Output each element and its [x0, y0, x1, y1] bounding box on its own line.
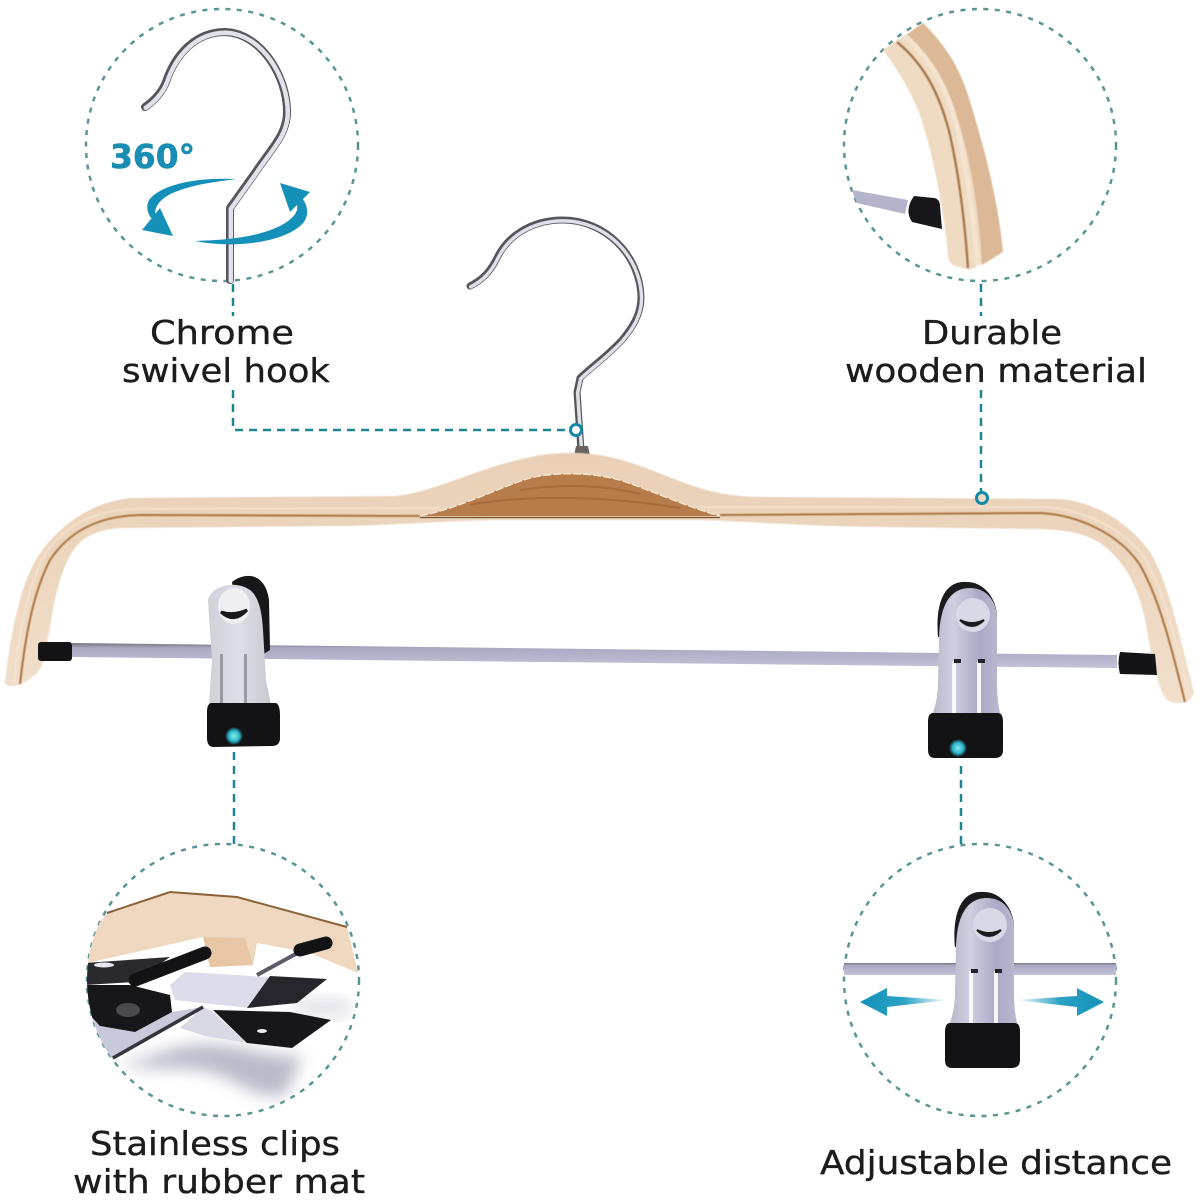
clip photo	[85, 892, 358, 1096]
marker: right clip	[949, 739, 967, 757]
panel: adjustable distance	[844, 844, 1116, 1116]
left clip	[207, 576, 280, 747]
label: durable wooden material: Durable	[922, 313, 1062, 352]
walnut centre panel	[420, 474, 720, 518]
arrow: left	[860, 988, 948, 1016]
wood arm close-up	[883, 23, 1003, 270]
black clip right	[247, 976, 327, 1008]
table shadow	[120, 1044, 303, 1096]
rotation arrow: left	[142, 179, 236, 236]
label: durable wooden material	[845, 313, 1147, 390]
dotted circle	[844, 9, 1116, 281]
rods	[256, 952, 297, 977]
end cap close-up	[908, 196, 942, 229]
right bar end cap	[1118, 652, 1157, 675]
label: chrome swivel hook: swivel hook	[122, 351, 331, 390]
label: stainless clips: Stainless clips	[90, 1124, 340, 1163]
label: stainless clips: with rubber mat	[73, 1162, 365, 1200]
chrome parts	[170, 972, 269, 1008]
rotation arrow: right	[195, 183, 310, 244]
hook close-up	[145, 32, 288, 281]
sliding bar	[72, 643, 1117, 668]
marker: wood	[976, 492, 988, 504]
marker: hook	[570, 424, 582, 436]
main hook	[470, 220, 642, 456]
panel: stainless clips	[85, 844, 359, 1116]
dotted circle	[87, 844, 359, 1116]
right clip	[928, 582, 1003, 758]
label: chrome swivel hook: Chrome	[150, 313, 294, 352]
wooden body	[5, 453, 1194, 703]
label: stainless clips	[73, 1124, 365, 1200]
dotted circle	[844, 844, 1116, 1116]
360 degree label: 360°	[110, 137, 195, 176]
panel: chrome swivel hook	[86, 9, 358, 281]
label: durable wooden material: wooden material	[845, 351, 1147, 390]
label: adjustable distance: Adjustable distance	[820, 1143, 1172, 1182]
connector lines	[233, 284, 981, 848]
hanger	[5, 220, 1194, 758]
arrow: right	[1016, 988, 1104, 1016]
wood laminate groove	[14, 507, 1190, 702]
bar close-up	[852, 190, 908, 214]
dotted circle	[86, 9, 358, 281]
black clip left	[85, 985, 172, 1032]
marker: left clip	[225, 727, 243, 745]
bar close-up	[844, 963, 1116, 975]
clip close-up	[945, 892, 1020, 1068]
wooden hanger arm	[87, 892, 358, 973]
panel: durable wooden material	[844, 9, 1116, 281]
left bar end cap	[38, 642, 72, 661]
label: chrome swivel hook	[122, 313, 331, 390]
